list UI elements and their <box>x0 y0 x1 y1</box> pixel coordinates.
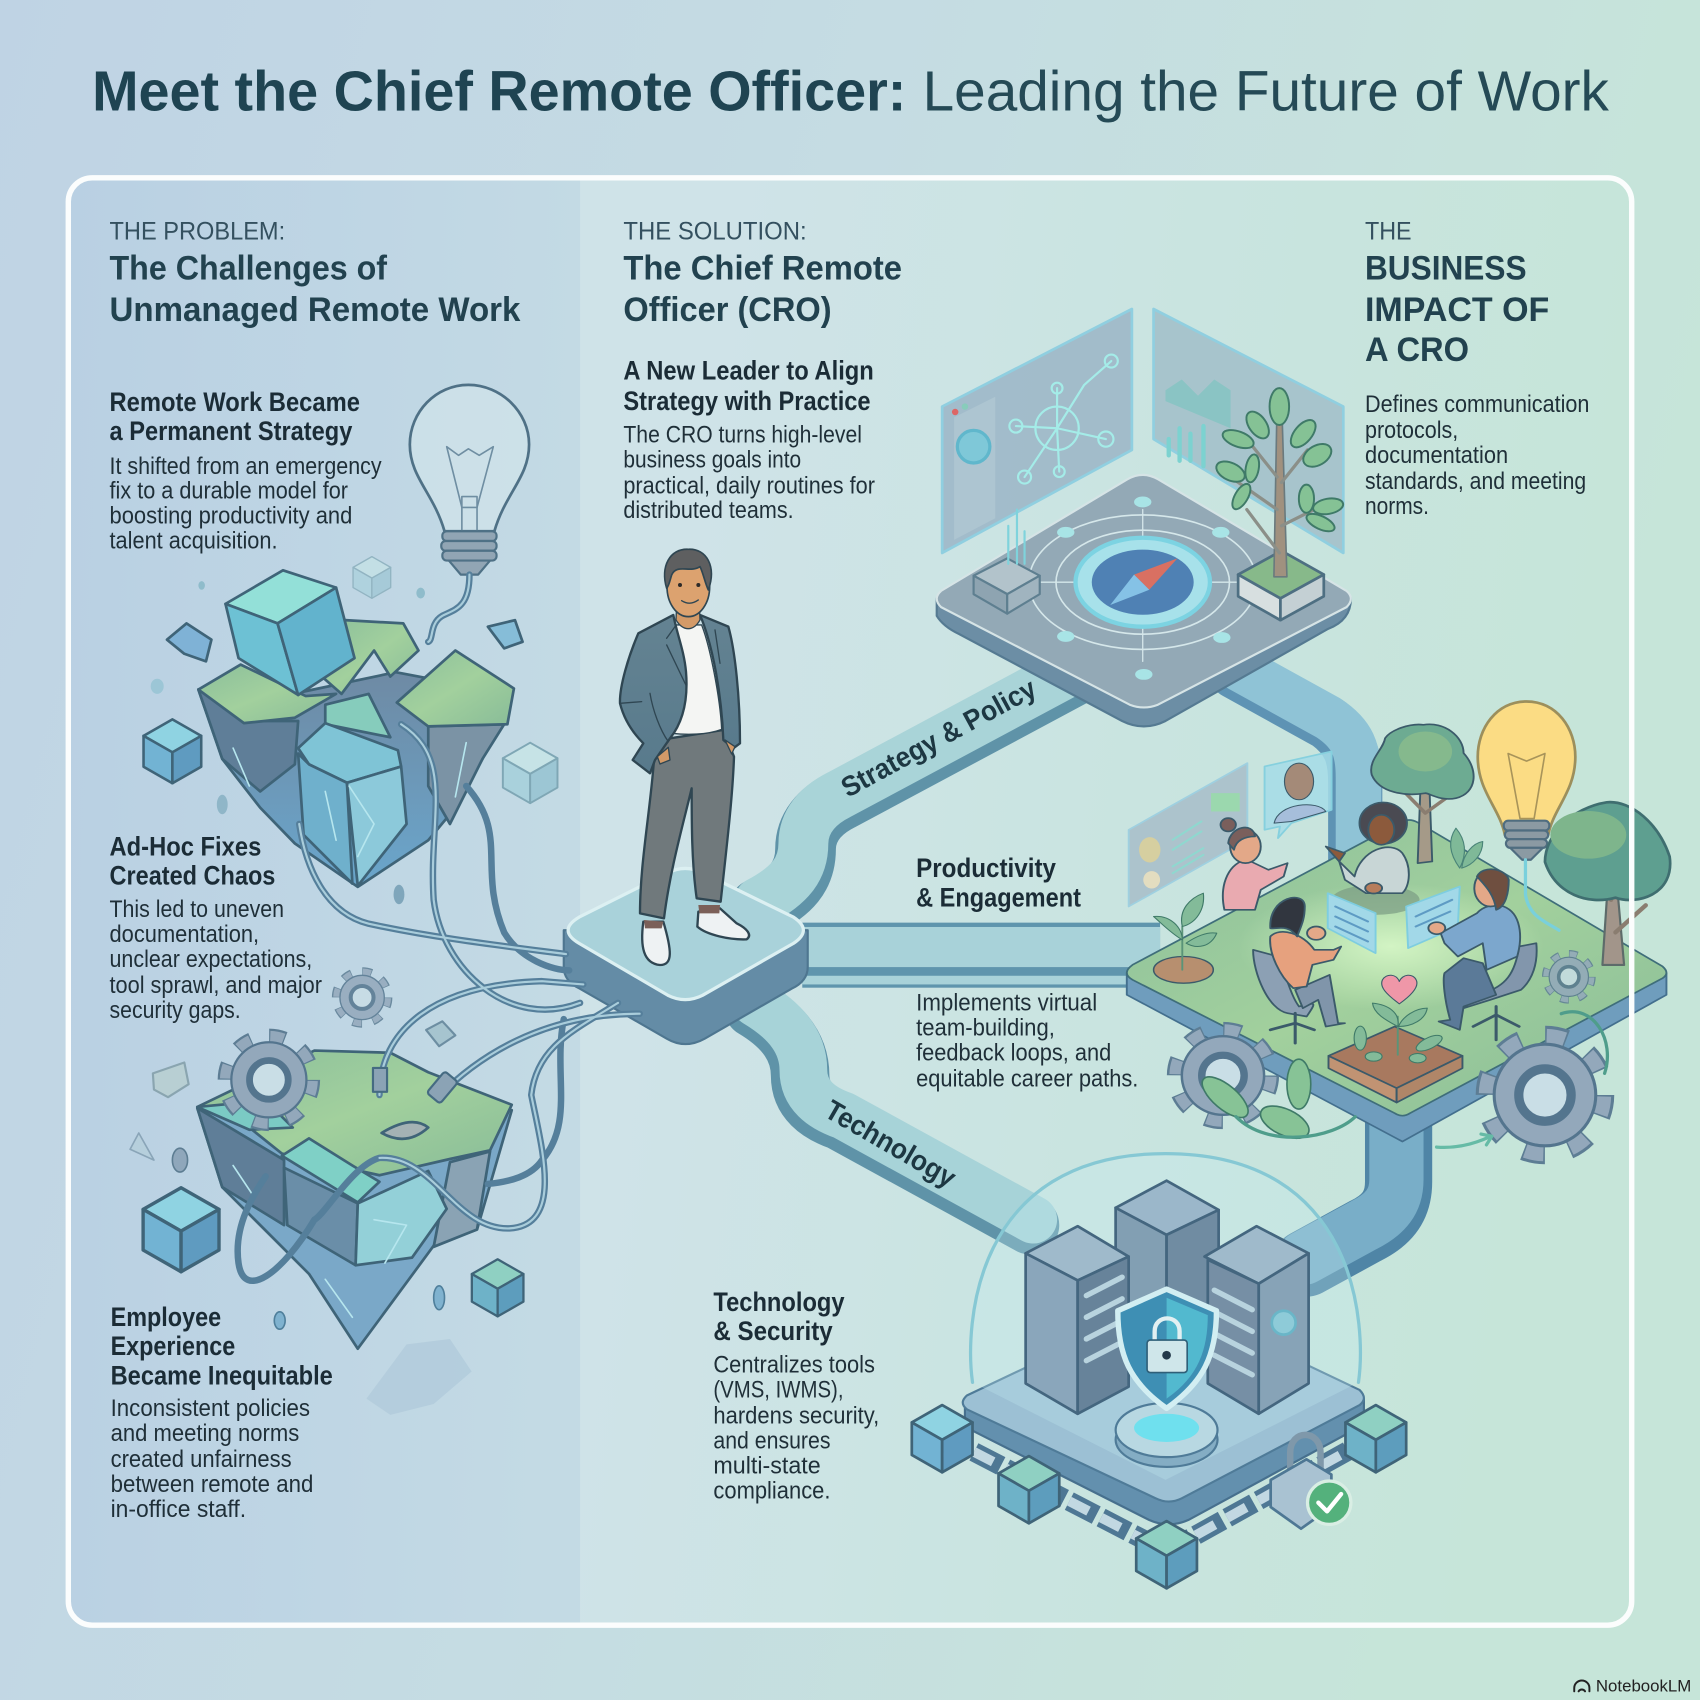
avatar bubble <box>1265 751 1332 838</box>
section: business impact: THE <box>1365 218 1412 246</box>
hub platform <box>564 868 808 1044</box>
chain nodes <box>912 1405 1406 1588</box>
shirt <box>672 625 722 734</box>
text: technology and security: Technology <box>713 1286 845 1317</box>
big ice cube <box>226 570 355 695</box>
road: strategy and policy <box>759 665 1084 909</box>
dome outline <box>971 1154 1360 1382</box>
text: communication protocols <box>1365 391 1589 520</box>
hands <box>657 740 735 764</box>
central glow <box>1238 883 1544 1010</box>
text: ad-hoc fixes: documentation, <box>110 921 259 948</box>
text: ad-hoc fixes: This led to uneven <box>110 896 284 923</box>
text: employee experience: Employee <box>111 1301 221 1332</box>
leafy shrub <box>1451 828 1483 868</box>
large gear <box>1488 1038 1602 1152</box>
text: ad-hoc fixes: unclear expectations, <box>110 946 312 973</box>
text: ad-hoc fixes: tool sprawl, and major <box>110 972 322 999</box>
text: productivity and engagement: & Engagement <box>916 881 1081 912</box>
section: the problem: The Challenges of <box>110 250 387 288</box>
tree <box>1213 388 1344 577</box>
section: the solution: The Chief Remote <box>623 250 902 288</box>
road: people to security <box>1304 1117 1399 1263</box>
shield with lock <box>1118 1289 1216 1408</box>
illustration: broken floating rock, upper <box>198 570 514 887</box>
text: new leader: distributed teams. <box>623 497 794 524</box>
text: new leader: The CRO turns high-level <box>623 421 862 448</box>
text: remote work became permanent: a Permanent Strategy <box>110 415 352 446</box>
panel: compass strategy platform <box>937 309 1351 726</box>
gear on lower rock <box>227 1038 311 1122</box>
woman with curly hair <box>1326 802 1420 915</box>
text: employee experience: Experience <box>111 1330 235 1361</box>
back server <box>1116 1181 1219 1344</box>
text: remote work became permanent: fix to a durable model for <box>110 478 348 505</box>
text: employee experience: Became Inequitable <box>111 1360 333 1391</box>
text: technology and security: & Security <box>713 1315 833 1346</box>
text: employee experience: between remote and <box>111 1471 313 1498</box>
main panel frame <box>68 178 1632 1625</box>
text: ad-hoc fixes <box>110 830 322 1024</box>
section: business impact: BUSINESS <box>1365 250 1527 288</box>
shoes <box>642 905 749 965</box>
text: employee experience: in-office staff. <box>111 1496 246 1523</box>
text: communication protocols: norms. <box>1365 493 1429 520</box>
section: the problem: THE PROBLEM: <box>110 218 285 246</box>
text: remote work became permanent: talent acquisition. <box>110 528 278 555</box>
neck <box>676 605 700 629</box>
text: remote work became permanent: boosting productivity and <box>110 503 352 530</box>
small box <box>974 510 1040 614</box>
face <box>678 583 700 587</box>
trousers <box>640 730 734 918</box>
floating cube fragments, upper <box>144 557 557 904</box>
tree back <box>1371 724 1474 863</box>
glow disc <box>1116 1403 1218 1467</box>
text: employee experience: Inconsistent policies <box>111 1395 310 1422</box>
chain <box>942 1435 1376 1551</box>
title: Meet the Chief Remote Officer: <box>92 60 906 123</box>
text: new leader: business goals into <box>623 446 801 473</box>
text: technology and security <box>713 1286 879 1504</box>
text: technology and security: multi-state <box>713 1452 821 1479</box>
section: business impact: IMPACT OF <box>1365 291 1549 329</box>
text: employee experience <box>111 1301 333 1523</box>
right server <box>1205 1226 1309 1414</box>
text: remote work became permanent: Remote Work Became <box>110 386 360 417</box>
garden bed <box>1328 1003 1462 1103</box>
section: business impact <box>1365 218 1549 369</box>
text: employee experience: created unfairness <box>111 1446 292 1473</box>
left server <box>1026 1226 1129 1414</box>
text: ad-hoc fixes: Created Chaos <box>110 860 275 891</box>
text: new leader <box>623 354 875 524</box>
section: business impact: A CRO <box>1365 331 1469 369</box>
text: technology and security: Centralizes tools <box>713 1352 875 1379</box>
jacket details <box>620 627 720 742</box>
jacket left <box>620 615 687 773</box>
seated woman <box>1253 898 1345 1043</box>
platform side <box>1127 973 1666 1142</box>
section: the solution: Officer (CRO) <box>623 291 832 329</box>
vine arrow <box>1561 1012 1607 1073</box>
text: productivity and engagement <box>916 852 1138 1092</box>
tree right <box>1545 802 1670 965</box>
yellow light bulb <box>1478 701 1575 930</box>
text: technology and security: hardens security, <box>713 1403 879 1430</box>
platform top <box>1127 820 1666 1116</box>
text: new leader: Strategy with Practice <box>623 385 871 416</box>
text: technology and security: (VMS, IWMS), <box>713 1377 843 1404</box>
text: new leader: practical, daily routines for <box>623 472 875 499</box>
section: the solution: THE SOLUTION: <box>623 218 807 246</box>
panel: people and engagement scene <box>1127 724 1666 1142</box>
section: the problem: Unmanaged Remote Work <box>110 291 521 329</box>
text: ad-hoc fixes: security gaps. <box>110 997 241 1024</box>
dashboard screen left <box>942 309 1132 553</box>
person: chief remote officer <box>620 549 749 965</box>
dome fill <box>971 1154 1360 1480</box>
small gear <box>1547 955 1591 999</box>
text: technology and security: compliance. <box>713 1477 830 1504</box>
padlock with check <box>1271 1435 1351 1529</box>
text: productivity and engagement: team-building, <box>916 1014 1055 1041</box>
text: technology and security: and ensures <box>713 1427 831 1454</box>
text: productivity and engagement: feedback loops, and <box>916 1039 1111 1066</box>
tangled cables <box>238 724 640 1281</box>
notebooklm credit: NotebookLM <box>1596 1677 1691 1695</box>
text: employee experience: and meeting norms <box>111 1420 299 1447</box>
road: compass to people <box>1236 667 1358 867</box>
chat window <box>1129 763 1247 906</box>
platform side <box>965 1399 1364 1524</box>
text: productivity and engagement: Implements virtual <box>916 989 1097 1016</box>
jacket right <box>700 615 740 748</box>
illustration: broken floating rock, lower <box>197 1051 512 1349</box>
planter <box>1238 551 1324 620</box>
holographic screens <box>1328 886 1460 953</box>
head <box>667 557 710 617</box>
text: communication protocols: standards, and meeting <box>1365 468 1586 495</box>
text: communication protocols: protocols, <box>1365 417 1458 444</box>
woman with bun <box>1221 818 1288 910</box>
platform top <box>937 475 1351 707</box>
floating fragments, lower <box>130 973 523 1415</box>
platform top <box>963 1303 1364 1502</box>
panel: security dome and servers <box>912 1154 1406 1588</box>
platform base <box>937 598 1351 726</box>
text: communication protocols: Defines communication <box>1365 391 1589 418</box>
section: the solution <box>623 218 902 329</box>
label: strategy and policy: Strategy & Policy <box>835 671 1042 803</box>
illustration: light bulb outline <box>410 385 529 642</box>
hair <box>665 549 711 590</box>
seated man <box>1428 869 1537 1040</box>
text: communication protocols: documentation <box>1365 442 1508 469</box>
heart <box>1382 975 1417 1004</box>
text: remote work became permanent <box>110 386 382 555</box>
green arrow <box>1437 1134 1492 1147</box>
panel border <box>68 178 1632 1625</box>
label: technology: Technology <box>820 1093 962 1194</box>
text: remote work became permanent: It shifted from an emergency <box>110 453 382 480</box>
text: productivity and engagement: Productivity <box>916 852 1056 883</box>
potted seedling <box>1154 893 1217 983</box>
text: new leader: A New Leader to Align <box>623 354 874 385</box>
text: ad-hoc fixes: Ad-Hoc Fixes <box>110 830 261 861</box>
dashboard screen right <box>1154 309 1343 553</box>
text: productivity and engagement: equitable career paths. <box>916 1065 1138 1092</box>
gear with vine <box>1177 1031 1355 1145</box>
title: Leading the Future of Work <box>923 60 1610 123</box>
panel: problem column background <box>68 178 580 1625</box>
compass <box>1019 497 1268 680</box>
road: technology <box>754 1003 1033 1225</box>
title <box>92 60 1610 123</box>
section: the problem <box>110 218 521 329</box>
road: productivity and engagement <box>802 923 1160 988</box>
